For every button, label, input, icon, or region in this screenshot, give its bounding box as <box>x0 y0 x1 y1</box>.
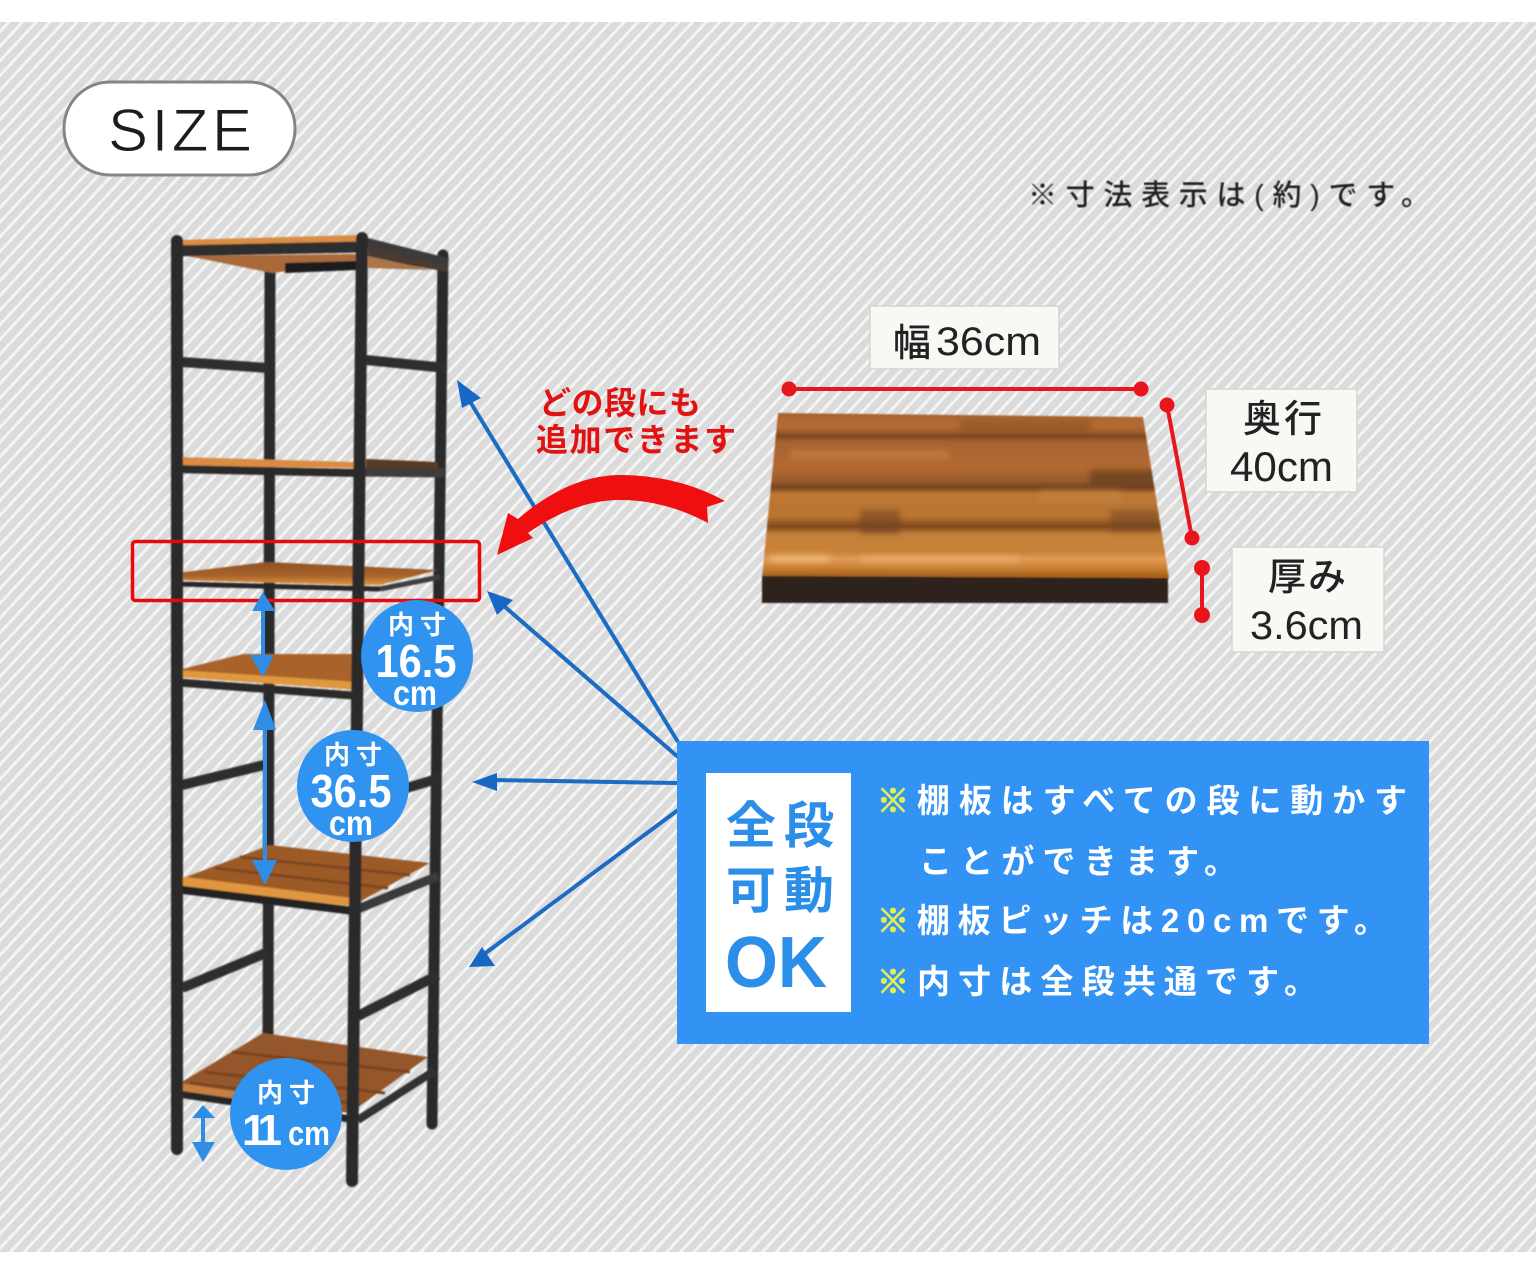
red curved arrow from board to shelf <box>497 475 725 555</box>
badge: inner size 11cm: cm <box>288 1115 330 1153</box>
badge: inner size 36.5cm: 内寸 <box>324 740 382 770</box>
label: width 36cm <box>870 306 1059 369</box>
badge: inner size 11cm: 11 <box>242 1106 282 1155</box>
all levels movable badge <box>706 773 851 1012</box>
SIZE heading pill: SIZE <box>108 97 252 164</box>
label: thickness 3.6cm: 厚み <box>1268 557 1346 599</box>
note markers: ※ <box>877 903 909 939</box>
interior height arrow: 36.5cm <box>252 700 277 885</box>
label: depth 40cm: 40cm <box>1230 443 1333 490</box>
label: depth 40cm: 奥行 <box>1243 399 1322 441</box>
red dimension line: width <box>782 382 1148 396</box>
SIZE heading pill <box>64 82 295 175</box>
note lines: 内寸は全段共通です。 <box>917 963 1317 1000</box>
label: width 36cm: 幅 <box>893 323 931 365</box>
side braces <box>182 360 446 1016</box>
all levels movable badge: 可動 <box>726 863 834 919</box>
red caption: can be added to any level <box>536 385 736 458</box>
top shelf <box>172 235 448 273</box>
note lines <box>917 782 1407 1000</box>
badge: inner size 36.5cm: 36.5 <box>310 765 392 817</box>
badge: inner size 16.5cm: 16.5 <box>376 635 456 687</box>
note markers: ※ <box>877 964 909 1000</box>
front posts <box>177 238 362 1181</box>
note lines: ことができます。 <box>919 843 1237 880</box>
note lines: 棚板ピッチは20cmです。 <box>917 902 1387 939</box>
red dimension line: thickness <box>1194 560 1210 623</box>
note markers: ※ <box>877 783 909 819</box>
blue info panel <box>677 741 1429 1044</box>
fourth shelf <box>172 654 360 696</box>
shelf board photo <box>762 413 1169 603</box>
label: width 36cm: 36cm <box>936 320 1041 364</box>
third shelf <box>177 562 440 589</box>
all levels movable badge: OK <box>725 923 827 1003</box>
fifth shelf <box>175 845 438 911</box>
badge: inner size 16.5cm: cm <box>393 674 437 713</box>
blue arrows from panel to shelf levels <box>457 380 678 967</box>
badge: inner size 36.5cm: cm <box>329 804 373 843</box>
badge: inner size 11cm: 内寸 <box>257 1078 315 1108</box>
back posts <box>268 255 443 1124</box>
interior height arrow: 16.5cm <box>250 592 275 677</box>
all levels movable badge: 全段 <box>726 798 834 854</box>
label: depth 40cm <box>1206 389 1357 492</box>
note lines: 棚板はすべての段に動かす <box>917 782 1407 819</box>
badge: inner size 36.5cm <box>297 730 409 843</box>
badge: inner size 16.5cm: 内寸 <box>388 610 446 640</box>
floor clearance arrow: 11cm <box>192 1105 215 1162</box>
shelf unit illustration <box>172 235 448 1181</box>
red dimension line: depth <box>1160 398 1200 546</box>
note: dimensions are approximate: ※寸法表示は(約)です。 <box>1028 179 1430 212</box>
note markers <box>877 783 909 1000</box>
label: thickness 3.6cm <box>1232 547 1384 652</box>
badge: inner size 16.5cm <box>361 600 473 713</box>
bottom shelf <box>178 1033 434 1120</box>
label: thickness 3.6cm: 3.6cm <box>1250 604 1363 648</box>
red highlight frame around one shelf <box>132 542 480 600</box>
second shelf <box>172 457 444 473</box>
red caption: can be added to any level: 追加できます <box>536 422 736 458</box>
badge: inner size 11cm <box>230 1058 342 1170</box>
red caption: can be added to any level: どの段にも <box>539 385 701 421</box>
